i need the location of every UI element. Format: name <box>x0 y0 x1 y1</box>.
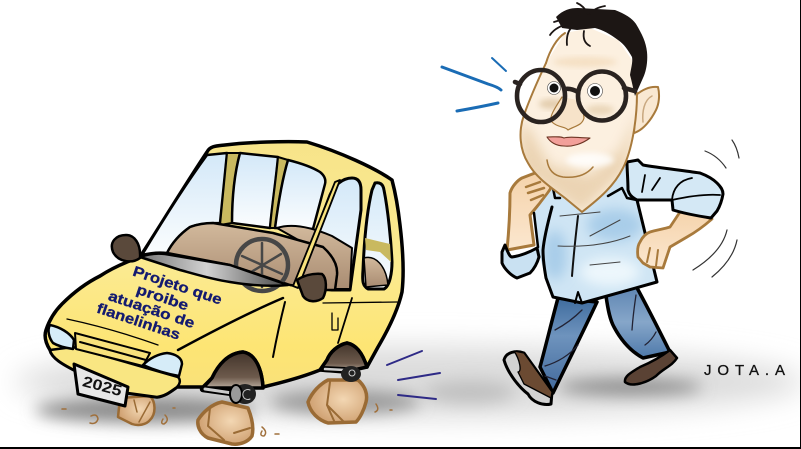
hood slogan <box>94 264 224 344</box>
man <box>442 3 739 405</box>
door pillar <box>293 180 340 288</box>
eyes <box>548 82 602 98</box>
surprise lines <box>442 58 506 111</box>
second seat <box>277 226 352 289</box>
signature: JOTA.A <box>704 362 785 379</box>
neck <box>556 184 610 212</box>
side glass: first <box>232 153 278 228</box>
chin line <box>547 160 593 177</box>
face <box>520 28 640 212</box>
right forearm and hand <box>638 209 712 268</box>
front bumper <box>50 347 180 397</box>
windshield <box>142 153 227 255</box>
headlight: left <box>49 325 74 349</box>
right sleeve <box>627 160 723 218</box>
pillar: middle <box>270 157 288 228</box>
trousers: front leg <box>540 298 597 393</box>
rear olive panel <box>365 238 391 262</box>
left cuff <box>502 245 539 278</box>
license plate <box>74 364 128 406</box>
motion lines <box>693 140 739 277</box>
car body <box>45 142 403 397</box>
ear inner <box>643 96 652 122</box>
glasses <box>515 70 635 122</box>
hood slogan: Projeto que <box>131 264 224 309</box>
axle: front <box>203 389 232 393</box>
hood slogan: flanelinhas <box>94 301 182 344</box>
trousers: back leg <box>606 286 670 358</box>
hood slogan: proibe <box>134 282 190 314</box>
rear seat <box>364 257 388 287</box>
hub: front <box>230 384 256 404</box>
steering wheel <box>236 239 288 291</box>
speed lines <box>387 351 440 399</box>
hood slogan: atuação de <box>106 288 196 332</box>
shirt <box>534 162 657 303</box>
headlight: right <box>143 353 182 376</box>
shoe: back <box>625 350 677 384</box>
dirt crumbs <box>62 404 392 436</box>
dashboard and seat <box>167 223 337 290</box>
rock: rear wheel <box>308 380 367 423</box>
nose <box>551 97 584 130</box>
hood <box>140 254 288 286</box>
hub: rear <box>341 366 361 382</box>
pillar: front <box>220 153 240 225</box>
axle: rear <box>323 369 345 370</box>
rock: front wheel <box>198 402 253 444</box>
ground shadow <box>15 346 801 423</box>
left forearm and hand <box>507 173 551 250</box>
license plate: 2025 <box>81 373 124 400</box>
body lines <box>67 298 397 357</box>
hair <box>550 3 647 96</box>
wheel arch: front <box>203 352 263 388</box>
side glass: second <box>275 160 325 229</box>
grille <box>75 333 150 366</box>
car <box>45 142 440 444</box>
ear <box>634 87 659 133</box>
mirror: left <box>112 235 140 261</box>
mouth <box>547 137 590 146</box>
mirror: right <box>297 274 326 301</box>
shoe: front <box>504 351 552 405</box>
rear window <box>363 183 392 289</box>
wheel arch: rear <box>320 343 367 372</box>
rock: front under bumper <box>118 396 154 425</box>
door glass <box>296 178 361 290</box>
